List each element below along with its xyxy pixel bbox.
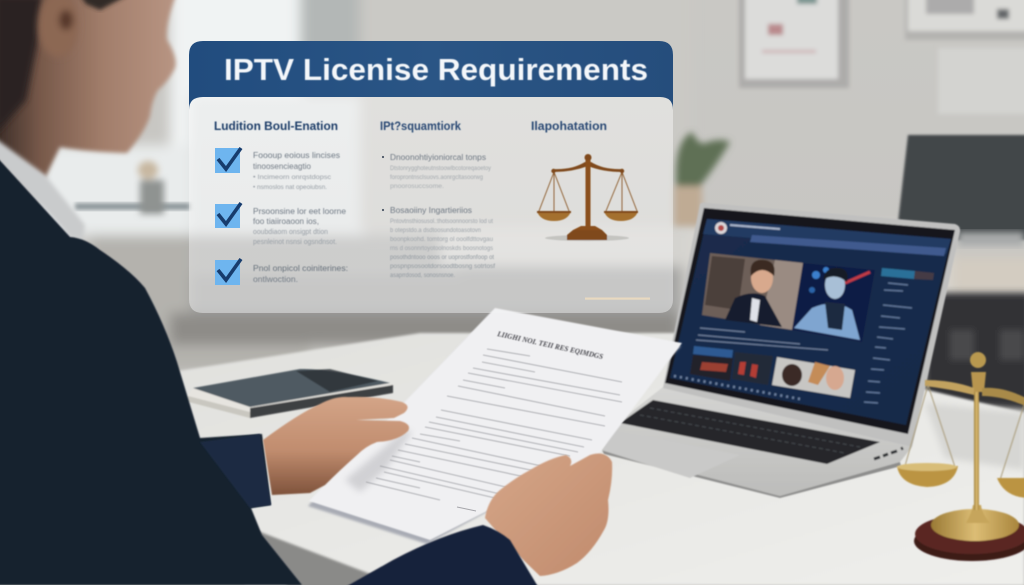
pen holder <box>138 161 164 214</box>
bullet group one: Dnoonohtiyioniorcal tonps <box>390 153 486 162</box>
check item two: foo tiaiiroaoon ios, <box>253 217 319 226</box>
wall pictures <box>739 0 1024 114</box>
bullet group two <box>382 206 495 279</box>
left pan <box>905 385 955 467</box>
document heading: LIIGHI NOI. TEII RES EQIMDGS <box>496 329 604 361</box>
bullet group two: asaprrdosod, sonosnsnoe. <box>390 273 455 279</box>
screen display <box>670 219 951 425</box>
tablet <box>185 369 393 418</box>
thumbnail row <box>690 346 855 398</box>
brass dome <box>931 509 1019 541</box>
column heading: Ilapohatation <box>531 121 607 133</box>
icon: balance scale <box>537 154 638 241</box>
bullet group two: Pntovtnsthiosusol.:thotsoonnoorsto lod ut <box>390 219 493 225</box>
check item three: Pnol onpicol coiniterines: <box>253 263 348 273</box>
column: checklist <box>214 121 348 285</box>
check item two: Prsoonsine lor eet loorne <box>253 206 346 216</box>
featured video two <box>792 263 875 342</box>
cuff <box>200 434 271 508</box>
caption rows <box>696 328 828 350</box>
column heading: Ludition Boul-Enation <box>214 121 338 133</box>
check item two <box>215 203 346 246</box>
check item three: ontlwoction. <box>253 275 298 284</box>
bullet group two: posothdntooo ooos or uoprostfonfoop ot <box>390 255 494 261</box>
brass pole <box>974 385 979 510</box>
face <box>0 0 176 178</box>
desk <box>178 333 1024 585</box>
column: requirements <box>380 121 495 279</box>
laptop <box>601 203 960 498</box>
check item one <box>215 148 340 191</box>
bullet group two: boonpkoohd. tomtorg ol ooolfdttovgau <box>390 237 493 243</box>
check item one: • nsmoslos nat opeoiubsn. <box>253 184 327 191</box>
bullet group one: pnoorosuccsome. <box>390 184 444 190</box>
ports <box>874 448 903 459</box>
column heading: IPt?squamtiork <box>380 121 462 133</box>
desk front shadow <box>255 530 373 585</box>
panel: IPTV license requirements <box>189 41 673 313</box>
column: regulation <box>531 121 650 300</box>
panel body <box>189 97 673 313</box>
trackpad <box>601 430 740 478</box>
right hand <box>485 454 612 576</box>
sidebar rows <box>864 283 912 403</box>
bullet group two: pospnpsosootdorsoodtbosng sotrtosf <box>390 264 495 270</box>
check item three <box>215 259 348 285</box>
screen bezel <box>663 203 960 447</box>
bullet group two: b otepstdo.a dsdtoosundotoasotovn <box>390 228 481 234</box>
hair <box>0 0 42 135</box>
bullet group one <box>382 153 491 190</box>
document body lines <box>366 349 622 500</box>
right pan <box>1000 405 1024 480</box>
dark furniture below counter <box>925 293 1024 410</box>
panel header <box>189 41 673 110</box>
check item two: ooubdiaom onsigpt dtion <box>253 229 328 236</box>
wooden base <box>914 521 1024 561</box>
person <box>0 0 302 585</box>
hair top <box>80 0 128 10</box>
monitor stand <box>958 232 1024 246</box>
brass scales <box>897 352 1024 561</box>
check item one: tinoosencieagtio <box>253 161 311 171</box>
bullet group one: foroprontnsclsuovs.aonrgcltasoorwg <box>390 175 483 181</box>
jacket <box>0 155 302 585</box>
ear <box>38 0 78 57</box>
window desk strip <box>75 203 190 210</box>
featured video one <box>702 253 803 330</box>
bullet group one: Dtstonrygghoteutnstoowlbcotoreqaoetoy <box>390 166 491 172</box>
taskbar dots <box>674 376 800 399</box>
laptop base <box>602 387 912 496</box>
left hand <box>263 397 409 495</box>
document <box>308 308 682 544</box>
finger shadow <box>345 430 412 492</box>
title: IPTV Licenise Requirements <box>224 52 648 87</box>
background monitor <box>896 135 1024 240</box>
potted plant <box>674 132 730 226</box>
keyboard <box>620 400 880 464</box>
shirt collar <box>0 138 85 240</box>
bullet group two: rns d osonnrtoyotoolnoskds boosnotogs <box>390 246 493 252</box>
near sleeve <box>340 525 540 585</box>
check item one: • Incimeorn onrqstdopsc <box>253 174 332 181</box>
accent line <box>585 298 650 300</box>
check item two: pesnleinot nsnsi ogsndnsot. <box>253 239 337 246</box>
bullet group two: Bosaoiiny Ingartieriios <box>390 206 472 215</box>
check item one: Foooup eoious lincises <box>253 150 340 160</box>
